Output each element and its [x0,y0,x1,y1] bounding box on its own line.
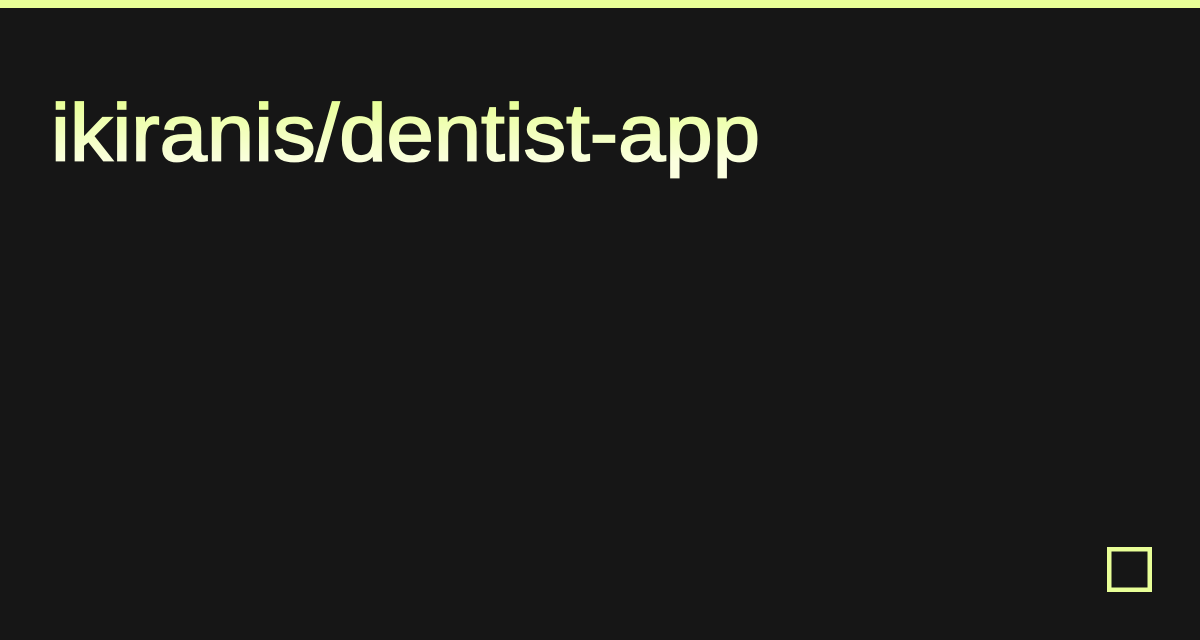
title: ikiranis/dentist-app [51,88,760,178]
top accent bar [0,0,1200,8]
icon: square outline [1109,549,1150,590]
